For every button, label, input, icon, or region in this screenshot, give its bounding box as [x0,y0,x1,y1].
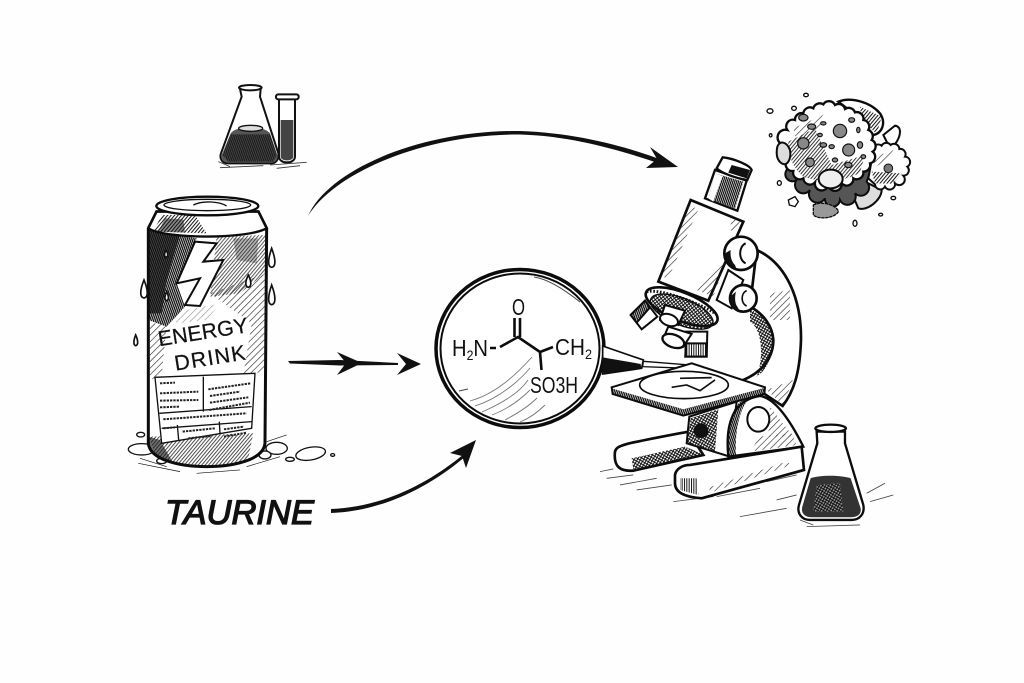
pointer needle [603,346,689,374]
table strokes [218,162,307,168]
formula: H2N: 2 [467,347,474,363]
rear lump top right [838,100,883,135]
right lump [868,143,910,190]
eyepiece [705,157,752,211]
formula: H2N: N [473,335,488,361]
test tube [276,94,299,162]
icon: energy drink can [128,197,335,473]
droplets [134,248,275,346]
panel: magnifier with taurine molecule [436,270,604,428]
shoulder and rim [148,197,267,237]
can hatching [148,230,267,467]
chemical bonds [490,318,553,370]
base: right foot [675,447,804,498]
illustration: taurine from energy drink to microscope [128,84,912,527]
formula: SO3H: SO3H [530,372,578,398]
lens specks [459,277,580,391]
arrow: middle straight, can to molecule [288,352,421,375]
flask on table [798,425,864,520]
main boulder [777,101,876,191]
lower shard [853,183,882,209]
crumbs and specks [767,93,896,226]
nosepiece [641,279,722,336]
puddle and pebbles [128,432,335,473]
flask [220,85,278,163]
base: hump [728,396,803,457]
objective lenses [631,301,707,357]
shard top right [883,126,900,145]
magnifier ring [436,270,604,428]
base: pillar [687,402,737,457]
can text: ENERGY DRINK: ENERGY [156,313,250,351]
arm bracket [717,270,743,308]
arm [743,250,801,406]
can text: ENERGY DRINK: DRINK [173,341,247,376]
dark underside [785,162,872,207]
ground hatching [600,469,893,527]
can text: ENERGY DRINK [156,313,254,378]
arrow: bottom curved, TAURINE to molecule [331,440,476,513]
formula: H2N: H [452,335,469,361]
icon: microscope [600,157,893,527]
formula: O: O [512,294,525,320]
body tube [658,200,743,301]
base: left foot [615,432,705,471]
lens glare hatching [470,357,545,422]
nutrition label [155,373,255,443]
label: TAURINE: TAURINE [165,494,314,532]
formula: CH2: CH [555,334,588,360]
stage [612,363,765,416]
focus knobs [724,237,758,312]
icon: crumbling rock aggregate [767,93,910,226]
arrow: top curved, can to microscope [308,131,678,216]
formula: CH2: 2 [585,346,592,362]
can body [148,212,267,467]
lightning bolt [177,242,223,306]
icon: flask and test tube [218,85,307,168]
